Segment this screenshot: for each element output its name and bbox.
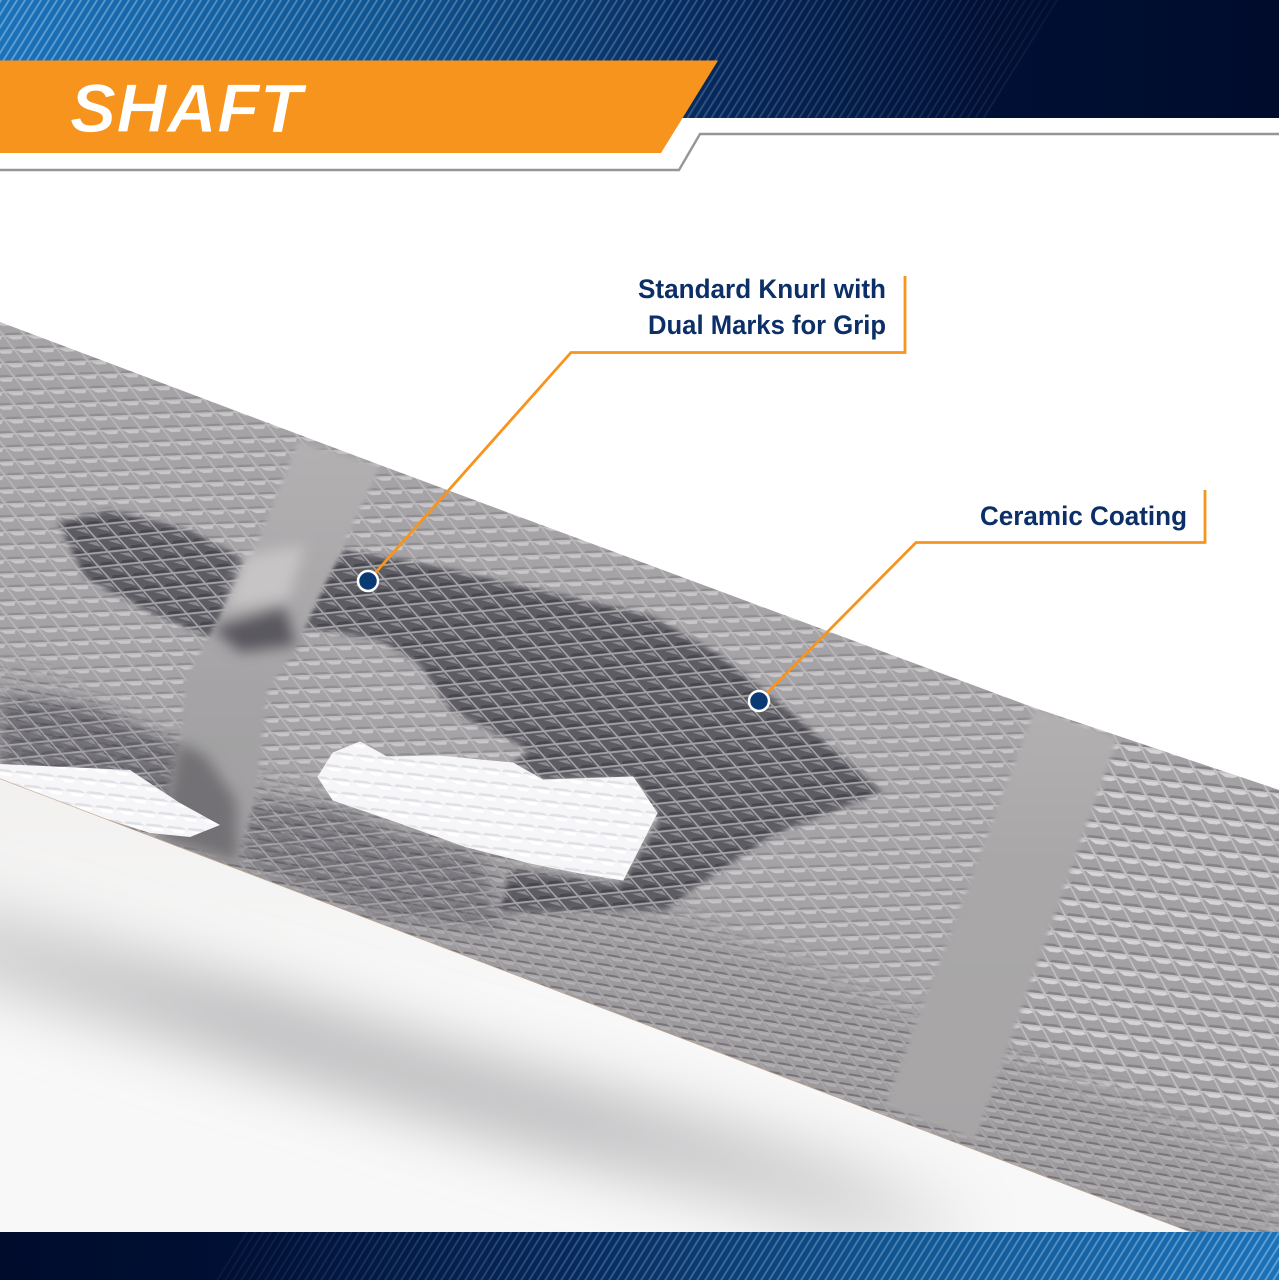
fine knurl along the lower edge bbox=[0, 657, 1279, 1232]
marker dot bbox=[749, 691, 769, 711]
header gradient bbox=[0, 0, 1279, 118]
band highlight bbox=[225, 545, 305, 610]
bar lower edge line bbox=[0, 779, 1190, 1232]
knurled surface bbox=[0, 300, 1279, 1240]
band shadow lower bbox=[160, 742, 238, 862]
grey outline of title banner bbox=[0, 134, 1279, 170]
dark reflection: lower left bbox=[0, 690, 180, 794]
callout: Standard Knurl: Dual Marks for Grip bbox=[648, 310, 886, 340]
footer gradient bbox=[0, 1232, 1279, 1280]
floor bbox=[0, 775, 1190, 1232]
barbell shaft bbox=[0, 300, 1279, 1240]
callout: Standard Knurl bbox=[358, 274, 905, 591]
title banner bbox=[0, 60, 718, 153]
callout: Ceramic Coating bbox=[749, 490, 1205, 711]
header band bbox=[0, 0, 1279, 118]
callout text: Standard Knurl with bbox=[638, 274, 886, 304]
footer band bbox=[0, 1232, 1279, 1280]
smooth band left bbox=[160, 442, 380, 862]
band shadow upper bbox=[212, 608, 296, 652]
white notch under the header bbox=[0, 118, 1279, 171]
smooth band right bbox=[885, 708, 1118, 1140]
leader line bbox=[368, 276, 905, 581]
dark reflection: main patch bbox=[303, 548, 884, 916]
callout text: Ceramic Coating bbox=[980, 501, 1187, 531]
floor shadow under the bar bbox=[0, 935, 980, 1240]
white reflection: centre bbox=[318, 742, 657, 880]
knurl on the right end bbox=[982, 720, 1279, 1232]
dark reflection: lower middle bbox=[240, 795, 503, 934]
white reflection: left bbox=[0, 764, 220, 837]
header stripes bbox=[0, 0, 1058, 118]
leader line bbox=[759, 490, 1205, 701]
marker dot bbox=[358, 571, 378, 591]
title: SHAFT bbox=[70, 70, 307, 147]
footer stripes bbox=[216, 1232, 1279, 1280]
dark reflection: left patch bbox=[56, 506, 246, 639]
